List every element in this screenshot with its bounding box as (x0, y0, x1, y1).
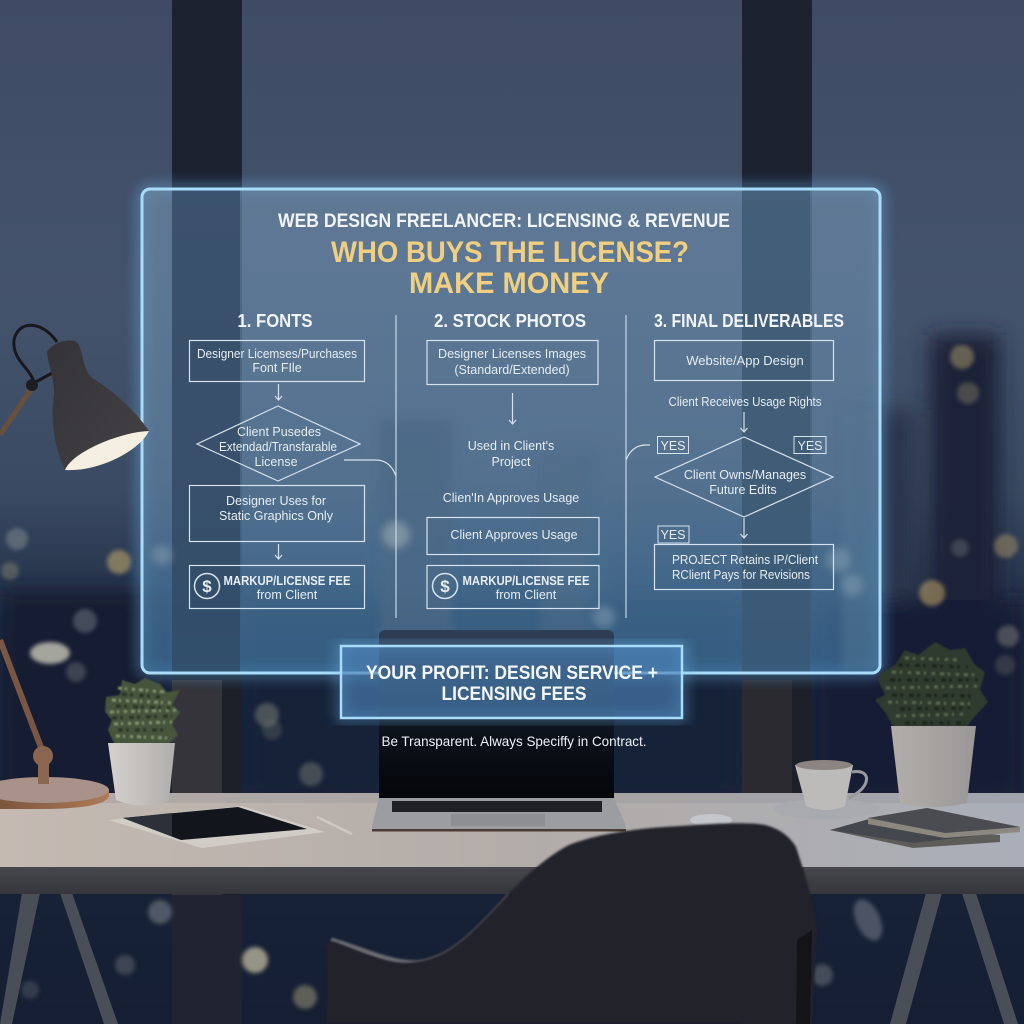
decision: client owns: Client Owns/Manages (684, 468, 806, 482)
text: used in project: Project (492, 455, 531, 469)
keyboard (392, 801, 602, 812)
box: client approves usage: Client Approves Usage (450, 528, 578, 542)
heading: main title: MAKE MONEY (409, 267, 609, 300)
icon: dollar (194, 574, 220, 598)
glass panel: main hologram frame (142, 189, 880, 673)
icon: dollar: $ (440, 577, 450, 596)
column 1: fonts (190, 311, 396, 608)
box: license fee: from Client (496, 588, 557, 602)
window pillars (172, 0, 812, 1024)
arrow (509, 393, 516, 424)
profit box (341, 646, 682, 718)
lamp base (0, 777, 109, 809)
box: project retains (654, 544, 834, 590)
icon: dollar (432, 574, 458, 598)
box: client approves usage (427, 518, 599, 554)
arrow (740, 412, 748, 432)
arrow (275, 544, 282, 559)
foliage (875, 642, 988, 730)
mouse (690, 814, 732, 826)
coffee cup (773, 760, 879, 819)
lamp joint (33, 746, 53, 784)
box: project retains: RClient Pays for Revisions (672, 568, 810, 582)
lamp light (65, 431, 149, 470)
trackpad (451, 814, 545, 826)
box: website design: Website/App Design (686, 353, 804, 368)
box: licenses images: Designer Licenses Images (438, 347, 586, 361)
box: license fee (427, 566, 599, 608)
arrow (740, 518, 748, 538)
box: static graphics (190, 486, 364, 542)
box: static graphics: Designer Uses for (226, 494, 326, 508)
desk legs (0, 893, 1018, 1024)
laptop screen (379, 630, 614, 798)
column 2: stock photos (427, 311, 599, 608)
bokeh city lights (1, 345, 1019, 1009)
box: licenses images (427, 340, 598, 384)
profit box: LICENSING FEES (442, 683, 586, 705)
lamp shade (47, 340, 149, 470)
box: licenses images: (Standard/Extended) (454, 363, 570, 377)
handle (848, 771, 867, 798)
box: static graphics: Static Graphics Only (219, 509, 334, 523)
text: usage rights: Client Receives Usage Rights (668, 395, 822, 409)
box: project retains: PROJECT Retains IP/Client (672, 553, 818, 567)
pot (891, 726, 976, 807)
column 3: final deliverables (626, 311, 844, 590)
pot (108, 743, 175, 806)
box: website design (654, 340, 834, 380)
icon: dollar: $ (202, 577, 212, 596)
badge: yes right: YES (797, 439, 823, 453)
column dividers (396, 315, 626, 618)
desk lamp (0, 325, 149, 809)
box: purchases font file: Font FIle (252, 361, 302, 375)
decision: client owns: Future Edits (709, 483, 777, 497)
profit box: YOUR PROFIT: DESIGN SERVICE + (366, 662, 658, 684)
badge: yes lower (658, 526, 689, 543)
connector to divider (344, 460, 396, 476)
text: used in project (468, 439, 554, 469)
box: license fee (190, 566, 364, 608)
box: license fee: MARKUP/LICENSE FEE (224, 574, 350, 588)
chair back (326, 823, 817, 1024)
box: purchases font file: Designer Licemses/Purchases (197, 347, 357, 361)
column heading: 2. STOCK PHOTOS (434, 311, 586, 331)
box: purchases font file (190, 340, 364, 382)
heading: main title (331, 236, 689, 300)
decision: client license: Extendad/Transfarable (219, 440, 337, 454)
lamp cord and connector (14, 325, 57, 385)
text: client approves: Clien'In Approves Usage (443, 491, 579, 505)
heading: overline: WEB DESIGN FREELANCER: LICENSING & REVENUE (278, 210, 730, 232)
desk (0, 793, 1024, 894)
chair (326, 823, 817, 1024)
decision: client license: Client Pusedes (237, 425, 321, 439)
decision: client license (197, 406, 360, 481)
footer note: Be Transparent. Always Speciffy in Contract. (382, 733, 646, 749)
box: license fee: MARKUP/LICENSE FEE (462, 574, 590, 588)
chair slit (796, 930, 812, 1024)
laptop base (372, 792, 626, 832)
notebooks (830, 808, 1020, 848)
badge: yes left: YES (660, 439, 686, 453)
badge: yes left (658, 436, 688, 454)
plant right (875, 642, 988, 807)
plant left (105, 678, 180, 806)
foliage (105, 678, 180, 745)
badge: yes right (794, 436, 826, 454)
tablet (108, 806, 325, 848)
decision: client license: License (254, 455, 298, 469)
cup body (795, 760, 853, 810)
saucer (773, 799, 879, 819)
column heading: 3. FINAL DELIVERABLES (654, 311, 844, 331)
decision: client owns (655, 437, 833, 517)
lamp arm upper (0, 388, 32, 435)
lamp arm lower (0, 640, 42, 750)
column heading: 1. FONTS (238, 311, 312, 331)
box: license fee: from Client (257, 588, 318, 602)
text: used in project: Used in Client's (468, 439, 554, 453)
connector to divider (626, 445, 650, 460)
arrow (275, 384, 282, 400)
chair lip (331, 895, 510, 963)
heading: main title: WHO BUYS THE LICENSE? (331, 236, 689, 269)
pencil (317, 817, 352, 834)
badge: yes lower: YES (660, 528, 686, 542)
